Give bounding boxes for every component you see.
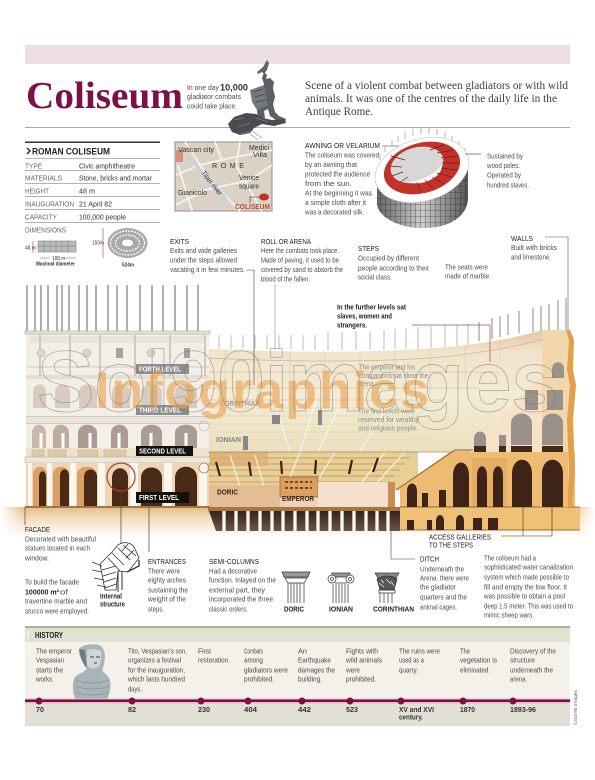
panel: roman coliseum fact table: 100,000 people <box>79 212 126 222</box>
event 1870: vegetation is <box>460 656 497 664</box>
event 523: Fights with <box>346 646 378 656</box>
event 230: 230 <box>198 705 210 714</box>
history heading: HISTORY <box>35 631 64 640</box>
dimensions diagrams: 150m <box>92 240 104 246</box>
map of Rome: Tiber river <box>199 169 225 198</box>
interior stands <box>208 330 565 452</box>
sustained by poles note: wood poles. <box>486 161 520 170</box>
title rule <box>25 127 570 128</box>
steps note: social class. <box>358 272 392 282</box>
event 1893-96: underneath the <box>510 666 553 674</box>
title side note: In one day <box>187 83 219 92</box>
sustained by poles note: Operated by <box>487 170 521 180</box>
ditch note: Underneath the <box>420 564 464 574</box>
panel: roman coliseum fact table: Stone, bricks and mortar <box>79 174 152 182</box>
panel: roman coliseum fact table: ROMAN COLISEUM <box>32 146 110 156</box>
icon: bust of Vespasian <box>73 644 111 699</box>
access galleries note: ACCESS GALLERIES <box>429 532 491 542</box>
water system note: sophisticated water canalization <box>484 562 573 572</box>
steps note: Occupied by different <box>358 254 419 262</box>
right section walls <box>396 330 580 530</box>
roll or arena note: Here the combats took place. <box>261 246 339 255</box>
title: Coliseum <box>26 75 183 117</box>
intro text: animals. It was one of the centres of the daily life in the <box>305 93 557 105</box>
event 1893-96 <box>510 646 556 714</box>
velarium 3D model <box>374 128 470 228</box>
water system note: The coliseum had a <box>484 554 537 562</box>
level labels: FORTH LEVEL <box>139 364 182 374</box>
awning text: At the beginning it was <box>305 188 372 198</box>
event 523: were <box>345 666 360 674</box>
roll or arena note: blood of the fallen. <box>261 274 310 284</box>
facade note: window. <box>24 554 49 562</box>
third level <box>26 384 209 424</box>
title side note: 10,000 <box>220 82 248 92</box>
steps note <box>358 244 429 282</box>
ditch with cages <box>209 511 400 531</box>
detail circles <box>107 421 209 491</box>
second level <box>25 425 210 463</box>
panel: roman coliseum fact table: 21 April 82 <box>79 200 112 208</box>
awning text <box>304 141 405 216</box>
panel: roman coliseum fact table: DIMENSIONS <box>25 226 66 234</box>
semi-columns note: classic orders. <box>209 604 248 614</box>
facade note: stucco were employed. <box>25 606 89 616</box>
walls note: and limestone. <box>511 252 551 262</box>
event 442: Earthquake <box>298 656 331 664</box>
sustained by poles note: Sustained by <box>487 152 523 160</box>
faded notes in stands: companions sat close the <box>359 371 428 380</box>
entrances note: There were <box>148 566 180 576</box>
awning text: from the sun. <box>305 179 352 188</box>
level labels: THIRD LEVEL <box>139 406 182 414</box>
awning text: protected the audience <box>305 170 370 178</box>
dimensions diagrams: 524m <box>122 262 134 268</box>
event 82: which lasts hundred <box>127 674 185 684</box>
further levels note: In the further levels sat <box>337 302 407 312</box>
event 404: Combats <box>244 646 263 656</box>
dark strips under windows <box>474 446 563 452</box>
facade note <box>24 507 96 616</box>
ditch note: quarters and the <box>420 592 467 602</box>
event 404: prohibited. <box>244 674 274 684</box>
event XV and XVI century: XV and XVI <box>399 705 434 714</box>
intro text: Antique Rome. <box>305 106 373 118</box>
panel: roman coliseum fact table: CAPACITY <box>25 212 57 222</box>
faded notes in stands: arena. <box>359 379 375 388</box>
level labels: SECOND LEVEL <box>139 446 187 456</box>
icon: doric column <box>282 572 310 603</box>
internal structure caption: Internal <box>100 592 122 600</box>
internal structure caption <box>100 592 125 608</box>
dimensions diagrams: Maximal diameter <box>36 262 76 268</box>
water system note: was possible to obtain a pool <box>483 592 565 600</box>
watermark: Sol90images <box>37 334 559 430</box>
event 70: The emperor <box>36 646 72 656</box>
roof poles <box>27 285 198 332</box>
roll or arena note <box>261 237 343 350</box>
event 230 <box>198 646 230 714</box>
timeline axis <box>25 698 570 704</box>
water system note: deep 1.5 meter. This was used to <box>484 602 573 610</box>
upper grey windows <box>474 362 564 447</box>
map of Rome <box>175 142 272 211</box>
entrances note <box>147 557 188 614</box>
event 82: organizes a festival <box>128 656 181 664</box>
map of Rome: square <box>239 182 259 190</box>
icon: corinthian column <box>375 573 399 603</box>
faded notes in stands: The emperor and his <box>359 362 415 372</box>
title side note <box>187 82 248 110</box>
level labels <box>136 364 193 503</box>
top colour band <box>25 45 570 64</box>
poles on rim <box>219 324 468 350</box>
entrances note: eighty arches <box>148 576 186 584</box>
event XV and XVI century: century. <box>399 712 423 722</box>
event 442 <box>298 646 335 714</box>
walls note <box>511 234 568 330</box>
doric label: DORIC <box>284 606 304 614</box>
facade note: 100000 m² <box>25 588 60 596</box>
map of Rome: Venice <box>239 173 259 182</box>
icon: ionian column <box>328 573 354 603</box>
event 523 <box>345 646 382 714</box>
event 523: 523 <box>346 705 358 714</box>
facade note: statues located in each <box>25 544 90 552</box>
panel: roman coliseum fact table: MATERIALS <box>25 174 62 182</box>
event 1870: The <box>460 646 470 656</box>
event 82: days. <box>128 684 142 694</box>
exits note <box>170 237 254 385</box>
awning text: AWNING OR VELARIUM <box>305 141 380 150</box>
order labels on section: EMPEROR <box>282 496 314 503</box>
sustained by poles note: hundred slaves. <box>487 180 529 190</box>
faded notes in stands: reserved for wealthy <box>358 415 419 424</box>
seats note: The seats were <box>445 262 488 272</box>
event 70: starts the <box>36 666 63 674</box>
walls note: WALLS <box>511 234 533 243</box>
ditch note: animal cages. <box>420 602 457 612</box>
panel: roman coliseum fact table: INAUGURATION <box>25 200 74 208</box>
panel: roman coliseum fact table <box>25 142 160 234</box>
semi-columns note <box>209 557 276 614</box>
exits note: Exits and wide galleries <box>170 246 237 255</box>
event 442: building. <box>298 674 322 684</box>
facade note: travertine marble and <box>25 596 87 606</box>
map of Rome: ROME <box>212 161 244 170</box>
dimensions diagrams <box>25 228 148 268</box>
main cross-section illustration <box>0 285 595 539</box>
intro text <box>305 80 568 118</box>
ionian label: IONIAN <box>329 606 353 614</box>
podium and emperor box <box>208 477 400 511</box>
title side note: could take place. <box>187 102 237 110</box>
icon: internal structure arch <box>92 543 139 592</box>
water system note: system which made possible to <box>484 572 569 582</box>
entrances note: steps. <box>148 604 164 614</box>
seats note: made of marble. <box>445 272 491 280</box>
internal structure caption: structure <box>100 600 125 608</box>
panel: roman coliseum fact table: 48 m <box>79 186 95 196</box>
map of Rome: Medici <box>249 143 269 152</box>
event 70: 70 <box>36 705 44 714</box>
walls note: Built with bricks <box>511 243 557 252</box>
map of Rome: Vatican city <box>178 145 214 154</box>
event XV and XVI century <box>399 646 440 722</box>
ditch note: DITCH <box>420 554 439 564</box>
lower seating <box>208 452 470 490</box>
watermark: Infographics <box>95 362 429 420</box>
event 70: Vespasian <box>36 656 64 664</box>
facade note: of <box>60 588 69 596</box>
access galleries note <box>429 507 552 550</box>
event 70: works. <box>35 674 54 684</box>
panel: roman coliseum fact table: Civic amphitheatre <box>79 162 135 170</box>
seats note <box>445 262 491 280</box>
dark arches <box>407 460 563 530</box>
semi-columns note: function. Inlayed on the <box>209 576 276 584</box>
timeline dots <box>36 698 516 704</box>
awning text: a simple cloth after it <box>305 198 366 207</box>
water system note: fill and empty the low floor. It <box>484 582 567 592</box>
semi-columns note: SEMI-COLUMNS <box>209 557 259 566</box>
arch leader lines <box>121 491 149 552</box>
roll or arena note: Made of paving, it used to be <box>261 256 339 264</box>
entrances note: ENTRANCES <box>148 557 186 566</box>
panel: roman coliseum fact table: TYPE <box>25 162 42 170</box>
event 1870 <box>460 646 497 714</box>
credit: ©Sol 90 Images <box>572 689 578 725</box>
event 82 <box>127 646 187 714</box>
event 1893-96: arena. <box>510 674 527 684</box>
semi-columns note: Had a decorative <box>209 566 257 576</box>
roll or arena note: covered by sand to absorb the <box>261 265 343 274</box>
awning text: by an awning that <box>305 160 357 169</box>
map of Rome: Villa <box>253 150 267 159</box>
facade note: FACADE <box>25 525 50 534</box>
order labels on section: CORINTHIAN <box>220 401 260 408</box>
event 404: 404 <box>244 705 258 714</box>
entrances note: sustaining the <box>148 586 188 594</box>
event 230: First <box>198 646 211 656</box>
first level <box>26 463 209 507</box>
facade note: Decorated with beautiful <box>25 534 96 544</box>
steps note: STEPS <box>358 244 379 253</box>
event 82: Tito, Vespasian's son, <box>128 646 187 656</box>
event XV and XVI century: used as a <box>399 656 425 664</box>
event 70 <box>35 646 72 714</box>
semi-columns note: external part, they <box>209 586 265 594</box>
event 1870: 1870 <box>460 705 475 714</box>
event 1893-96: Discovery of the <box>510 646 556 656</box>
sustained by poles note <box>465 152 529 190</box>
ground <box>0 507 595 537</box>
corinthian label: CORINTHIAN <box>373 606 414 614</box>
order labels on section <box>216 401 314 503</box>
event 442: 442 <box>298 705 311 714</box>
entrances note: weight of the <box>147 594 186 604</box>
faded notes in stands: and religious people. <box>358 424 418 432</box>
event 523: prohibited. <box>346 674 376 684</box>
dimensions diagrams: 48 m <box>25 246 36 252</box>
icon: gladiator statue <box>228 60 286 140</box>
event 1870: eliminated. <box>460 666 490 674</box>
faded notes in stands: The first levels were <box>358 406 415 416</box>
panel: roman coliseum fact table: HEIGHT <box>25 186 49 196</box>
level labels: FIRST LEVEL <box>139 493 180 502</box>
order labels on section: DORIC <box>217 490 238 496</box>
dimensions diagrams: 188 m <box>52 256 65 262</box>
order labels on section: IONIAN <box>216 437 241 444</box>
access galleries note: TO THE STEPS <box>429 540 473 550</box>
event 230: restoration. <box>198 656 230 664</box>
map of Rome: COLISEUM <box>235 204 270 211</box>
event 1893-96: 1893-96 <box>510 705 536 714</box>
intro text: Scene of a violent combat between gladiators or with wild <box>305 80 568 92</box>
event XV and XVI century: quarry. <box>399 666 418 674</box>
awning text: The coliseum was covered <box>305 150 379 160</box>
fourth level <box>25 331 210 378</box>
further levels note <box>337 302 490 362</box>
event 82: 82 <box>128 705 136 714</box>
event XV and XVI century: The ruins were <box>399 646 440 656</box>
panel: history timeline <box>25 626 570 726</box>
ditch note <box>391 531 469 612</box>
water system note <box>483 554 573 620</box>
event 523: wild animals <box>345 656 382 664</box>
exits note: under the steps allowed <box>170 256 237 264</box>
faded notes in stands <box>358 362 428 432</box>
ditch note: the gladiator <box>420 582 457 592</box>
semi-columns note: incorporated the three <box>209 594 273 604</box>
title side note: gladiator combats <box>187 92 241 101</box>
water system note: mimic sheep wars. <box>484 610 534 620</box>
steps note: people according to their <box>358 264 429 272</box>
event 404: gladiators were <box>244 666 288 674</box>
event 82: for the inauguration, <box>128 666 185 674</box>
roll or arena note: ROLL OR ARENA <box>261 237 312 246</box>
event 404: among <box>244 656 263 664</box>
event 442: An <box>298 646 307 656</box>
awning text: was a decorated silk. <box>304 208 364 216</box>
map of Rome: Gianicolo <box>178 188 207 197</box>
facade note: To build the facade <box>25 578 79 586</box>
ditch note: Arena. there were <box>420 574 469 582</box>
exits note: vacating it in few minutes. <box>170 265 245 274</box>
further levels note: slaves, women and <box>337 312 392 320</box>
event 442: damages the <box>298 666 335 674</box>
exits note: EXITS <box>170 237 189 246</box>
event 1893-96: structure <box>510 656 535 664</box>
facade <box>25 285 210 508</box>
further levels note: strangers. <box>337 320 367 330</box>
event 404 <box>244 646 288 714</box>
